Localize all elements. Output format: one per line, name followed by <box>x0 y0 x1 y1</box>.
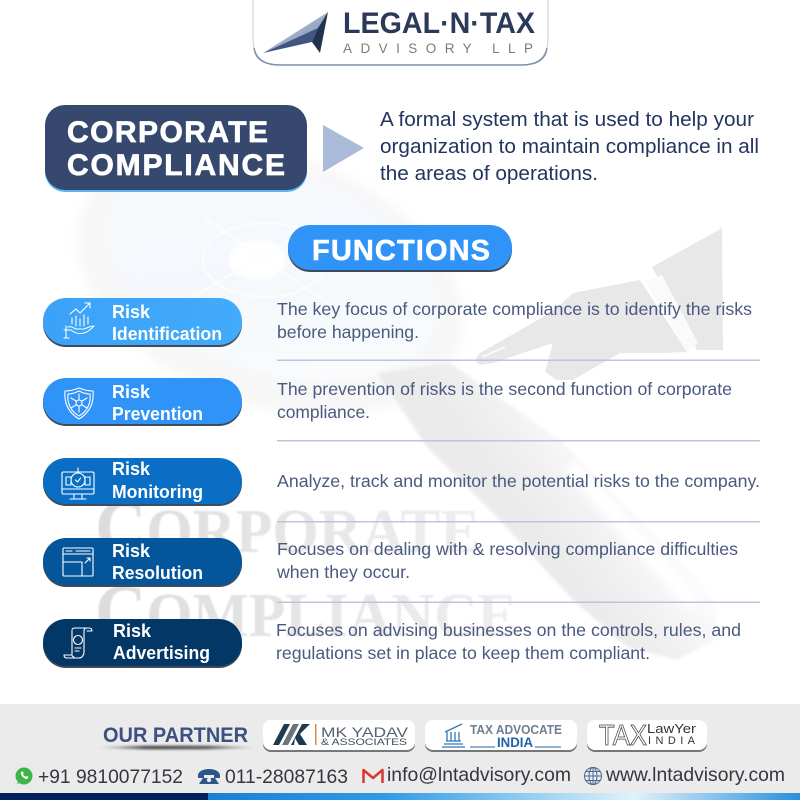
logo card <box>253 0 548 65</box>
function row: risk monitoring: Risk <box>112 459 151 479</box>
function row: risk identification: Risk <box>112 302 151 322</box>
background watermark: pointing hand <box>475 228 723 380</box>
partner logo: tax lawyer india: LawYer <box>647 722 696 736</box>
function row: risk resolution <box>43 538 242 587</box>
function row: risk prevention: Risk <box>112 382 151 402</box>
description: risk advertising <box>276 620 741 663</box>
logo subtitle: ADVISORY LLP <box>343 41 533 56</box>
icon: shield <box>65 388 93 419</box>
icon: hand with growth chart <box>64 303 94 338</box>
background watermark: magnifying glass <box>39 94 718 660</box>
function row: risk prevention: Prevention <box>112 404 203 424</box>
function row: risk advertising: Risk <box>113 621 152 641</box>
description: risk prevention: The prevention of risks is the second function of corporate <box>277 379 732 399</box>
icon: monitor <box>62 468 94 499</box>
partner logo: tax advocate india <box>425 720 577 752</box>
contact: telephone: 011-28087163 <box>225 766 348 788</box>
description text: the areas of operations. <box>380 162 598 185</box>
partner logo: mk yadav and associates: MK YADAV <box>321 724 409 740</box>
description text: organization to maintain compliance in all <box>380 135 759 158</box>
description: risk identification: before happening. <box>277 322 419 342</box>
function row: risk resolution: Resolution <box>112 563 203 583</box>
footer panel <box>0 704 800 800</box>
panel: corporate compliance title: COMPLIANCE <box>67 149 285 182</box>
contact: website: www.lntadvisory.com <box>605 764 785 786</box>
function row: risk advertising <box>43 619 242 668</box>
description: risk monitoring: Analyze, track and monitor the potential risks to the company. <box>277 471 760 491</box>
description: risk resolution: Focuses on dealing with & resolving compliance difficulties <box>277 539 738 559</box>
partner logo: mk yadav and associates <box>263 720 415 752</box>
function row: risk prevention <box>43 378 242 426</box>
function row: risk monitoring <box>43 458 242 506</box>
description: risk identification: The key focus of corporate compliance is to identify the risks <box>277 299 752 319</box>
function row: risk resolution: Risk <box>112 541 151 561</box>
background watermark: corporate compliance text: CORPORATE <box>95 487 480 569</box>
description: risk resolution <box>276 539 738 582</box>
background watermark: corporate compliance text <box>95 487 517 653</box>
heading: our partner: OUR PARTNER <box>103 723 248 747</box>
function row: risk identification <box>43 298 242 347</box>
partner logo: tax lawyer india <box>587 720 707 752</box>
description text: A formal system that is used to help your <box>380 108 754 131</box>
partner logo: tax advocate india: TAX ADVOCATE <box>470 723 562 737</box>
function row: risk advertising: Advertising <box>113 643 210 663</box>
function row: risk monitoring: Monitoring <box>112 482 203 502</box>
contact: email: info@lntadvisory.com <box>387 764 571 786</box>
partner logo: tax advocate india: INDIA <box>497 735 533 750</box>
partner logo: tax lawyer india: TAX <box>599 720 647 752</box>
heading: functions: FUNCTIONS <box>312 235 490 267</box>
function row: risk identification: Identification <box>112 324 222 344</box>
description: risk advertising: regulations set in place to keep them compliant. <box>276 643 650 663</box>
partner logo: tax lawyer india: INDIA <box>648 735 696 747</box>
description text <box>380 108 759 185</box>
description: risk identification <box>277 299 752 342</box>
icon: scroll document <box>64 628 92 658</box>
heading: functions <box>288 225 512 272</box>
background watermark: corporate compliance text: COMPLIANCE <box>95 571 517 653</box>
icon: browser window <box>63 548 93 576</box>
description: risk prevention <box>277 379 732 422</box>
arrow <box>323 125 364 172</box>
description: risk resolution: when they occur. <box>276 562 410 582</box>
icon: logo paper plane <box>263 12 328 53</box>
panel: corporate compliance title: CORPORATE <box>67 116 268 149</box>
icon: court building <box>442 724 465 747</box>
description: risk prevention: compliance. <box>277 402 370 422</box>
panel: corporate compliance title <box>45 105 307 192</box>
bottom colour bar <box>0 793 800 800</box>
description: risk advertising: Focuses on advising businesses on the controls, rules, and <box>276 620 741 640</box>
partner logo: mk yadav and associates: & ASSOCIATES <box>321 737 407 747</box>
logo wordmark: LEGAL·N·TAX <box>343 7 535 40</box>
contact: whatsapp: +91 9810077152 <box>38 766 183 788</box>
